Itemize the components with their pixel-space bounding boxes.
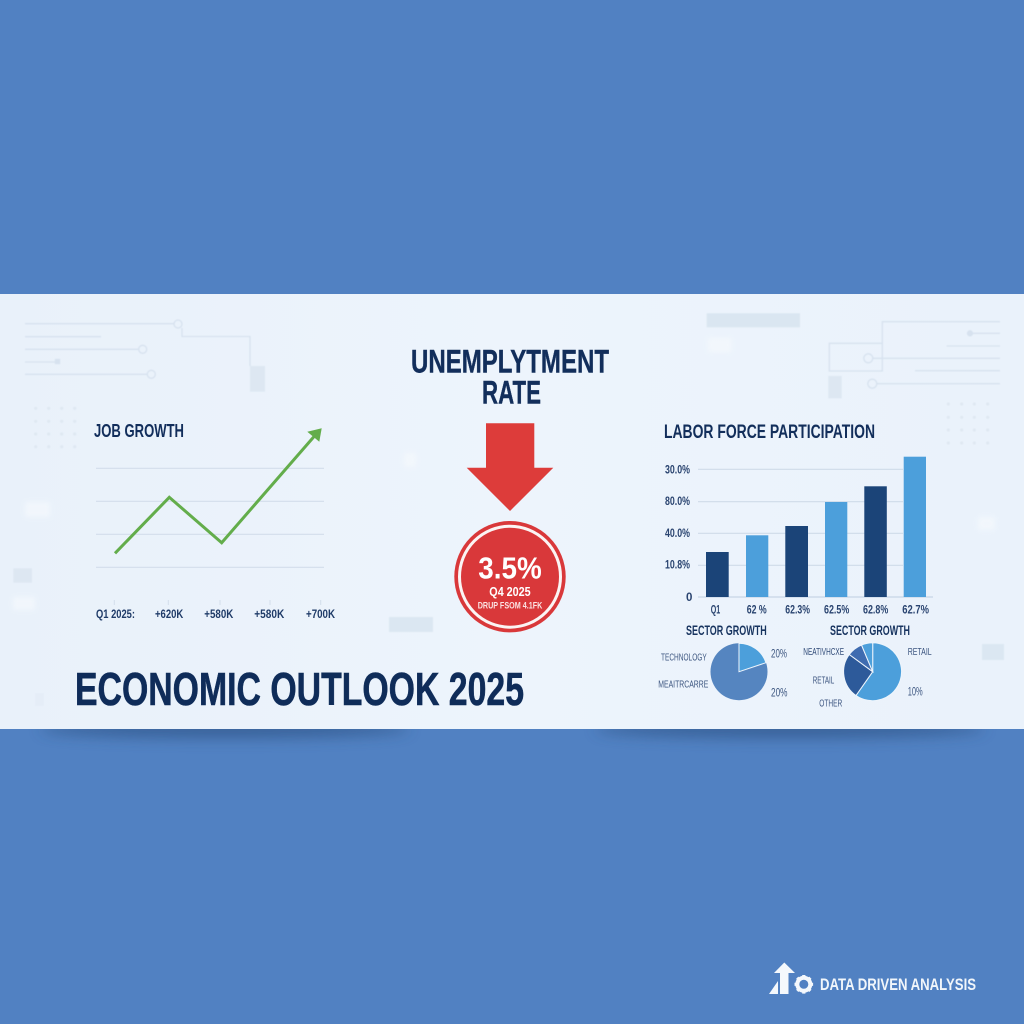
axis labels: job growth [96,607,335,621]
icon: red down arrow [467,423,553,511]
x axis labels: 62.8% [863,604,888,616]
callout: rate badge [454,521,566,632]
pie labels right: RETAIL [908,647,932,658]
pie labels left: 20% [771,649,787,661]
panel: unemployment rate [411,343,609,632]
heading: unemployment rate [411,343,609,410]
x axis labels: 62 % [747,604,767,616]
x axis labels [711,604,929,616]
brand logo [769,962,976,994]
panel: sector growth left [658,622,788,700]
y axis labels: 0 [686,592,692,604]
axis labels: job growth: Q1 2025: [96,607,135,621]
bar chart: labor force participation [698,457,933,597]
x axis labels: 62.3% [785,604,810,616]
brand name: DATA DRIVEN ANALYSIS [820,976,976,994]
x axis labels: 62.7% [902,604,929,616]
y axis labels: 30.0% [665,464,690,476]
decorative tech pattern left [13,320,265,706]
main title: ECONOMIC OUTLOOK 2025 [75,663,524,715]
soft white highlights [13,338,995,610]
pie labels right: NEATIVHCXE [803,647,844,658]
heading: unemployment rate: RATE [482,374,541,410]
heading: unemployment rate: UNEMPLYTMENT [411,343,609,379]
x axis labels: Q1 [711,604,721,616]
panel shadow [40,720,985,738]
callout: rate badge: Q4 2025 [489,585,531,599]
pie labels right: OTHER [819,699,842,710]
pie labels right: 10% [908,687,923,699]
y axis labels: 40.0% [665,528,690,540]
pie labels left: MEAITRCARRE [658,680,709,691]
pie labels left: TECHNOLOGY [661,653,707,664]
decorative tech pattern right [389,313,1004,660]
pie labels left: 20% [771,688,788,700]
panel: job growth [94,420,335,621]
heading: sector growth right: SECTOR GROWTH [830,622,910,638]
y axis labels: 80.0% [665,496,690,508]
pie labels left [658,649,788,700]
y axis labels [665,464,692,604]
axis labels: job growth: +700K [306,607,335,621]
line chart: job growth [96,428,324,605]
pie chart: sector growth right [844,643,902,701]
central white panel [0,294,1024,729]
callout: rate badge: DRUP FSOM 4.1FK [478,600,542,611]
axis labels: job growth: +580K [254,607,285,621]
panel: sector growth right [803,622,932,710]
icon: arrow and gear [769,962,813,994]
heading: labor force participation: LABOR FORCE PARTICIPATION [664,422,875,443]
heading: sector growth left: SECTOR GROWTH [686,622,767,638]
callout: rate badge: 3.5% [478,550,542,585]
heading: job growth: JOB GROWTH [94,420,184,441]
x axis labels: 62.5% [824,604,849,616]
pie chart: sector growth left [710,643,768,700]
axis labels: job growth: +580K [204,607,234,621]
pie labels right [803,647,932,710]
axis labels: job growth: +620K [155,607,184,621]
panel: labor force participation [664,422,933,616]
y axis labels: 10.8% [665,560,690,572]
pie labels right: RETAIL [813,675,835,686]
